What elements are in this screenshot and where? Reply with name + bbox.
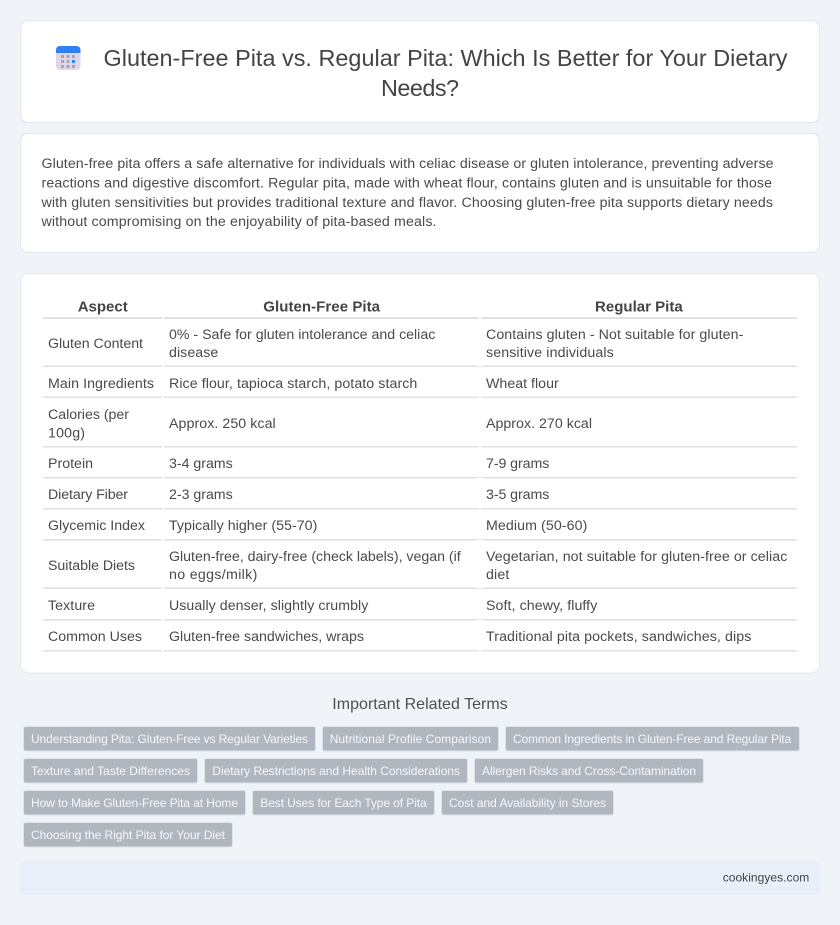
row: glycemic index: Medium (50-60)	[486, 518, 587, 534]
panel: related term tags: Best Uses for Each Type of Pita	[260, 796, 427, 810]
table rules	[43, 317, 797, 652]
row: protein: 3-4 grams	[169, 456, 233, 472]
row: common uses: Traditional pita pockets, sandwiches, dips	[486, 629, 751, 645]
row: dietary fiber: 3-5 grams	[486, 487, 549, 503]
row: suitable diets: no eggs/milk)	[169, 567, 257, 583]
row: suitable diets: Suitable Diets	[48, 558, 135, 574]
row: texture: Soft, chewy, fluffy	[486, 598, 598, 614]
heading: important related terms: Important Related Terms	[332, 696, 508, 713]
row: main ingredients: Wheat flour	[486, 376, 559, 392]
panel: related term tags: Dietary Restrictions and Health Considerations	[212, 764, 460, 778]
panel: related term tags: Understanding Pita: Gluten-Free vs Regular Varieties	[31, 732, 308, 746]
table header row: Gluten-Free Pita	[263, 299, 381, 316]
title: Needs?	[381, 75, 459, 101]
panel: introduction	[20, 134, 820, 252]
panel: related term tags: Choosing the Right Pita for Your Diet	[31, 828, 226, 842]
row: common uses: Common Uses	[48, 629, 142, 645]
row: suitable diets: Gluten-free, dairy-free (check labels), vegan (if	[169, 549, 461, 565]
title: Gluten-Free Pita vs. Regular Pita: Which Is Better for Your Dietary	[104, 45, 788, 71]
intro text: with gluten sensitivities but provides traditional texture and flavor. Choosing gluten-free pita supports dietary needs	[40, 195, 773, 211]
table header row: Regular Pita	[595, 299, 683, 316]
footer	[20, 861, 820, 895]
panel: related term tags: How to Make Gluten-Free Pita at Home	[31, 796, 238, 810]
row: calories: Approx. 250 kcal	[169, 416, 276, 432]
row: glycemic index	[48, 518, 587, 534]
row: calories: Approx. 270 kcal	[486, 416, 592, 432]
row: common uses: Gluten-free sandwiches, wraps	[169, 629, 364, 645]
table header row	[78, 299, 683, 316]
row: protein: Protein	[48, 456, 93, 472]
row: gluten content: Contains gluten - Not suitable for gluten-	[486, 327, 744, 343]
intro text: without compromising on the enjoyability of pita-based meals.	[40, 214, 436, 230]
row: gluten content: 0% - Safe for gluten intolerance and celiac	[169, 327, 435, 343]
intro text	[40, 156, 774, 230]
panel: related term tags: Cost and Availability in Stores	[449, 796, 606, 810]
row: gluten content	[48, 327, 744, 361]
row: main ingredients: Main Ingredients	[48, 376, 154, 392]
panel: related term tags	[24, 726, 800, 847]
row: calories: 100g)	[48, 426, 85, 442]
row: suitable diets: diet	[486, 567, 509, 583]
row: dietary fiber: Dietary Fiber	[48, 487, 128, 503]
title	[104, 45, 788, 101]
row: common uses	[48, 629, 751, 645]
panel: related term tags: Common Ingredients in Gluten-Free and Regular Pita	[513, 732, 792, 746]
row: protein: 7-9 grams	[486, 456, 549, 472]
row: gluten content: disease	[169, 345, 218, 361]
panel: related term tags: Texture and Taste Differences	[31, 764, 190, 778]
row: calories: Calories (per	[48, 407, 129, 423]
panel: comparison table	[20, 274, 820, 673]
row: suitable diets: Vegetarian, not suitable for gluten-free or celiac	[486, 549, 787, 565]
row: glycemic index: Glycemic Index	[48, 518, 145, 534]
row: suitable diets	[48, 549, 787, 583]
row: glycemic index: Typically higher (55-70)	[169, 518, 317, 534]
row: main ingredients: Rice flour, tapioca starch, potato starch	[169, 376, 417, 392]
intro text: reactions and digestive discomfort. Regular pita, made with wheat flour, contains gluten and is unsuitable for those	[42, 176, 772, 192]
table header row: Aspect	[78, 299, 128, 316]
row: texture	[48, 598, 598, 614]
row: protein	[48, 456, 549, 472]
row: texture: Texture	[48, 598, 95, 614]
footer: cookingyes.com	[723, 871, 809, 885]
row: gluten content: sensitive individuals	[486, 345, 614, 361]
panel: related term tags: Nutritional Profile Comparison	[330, 732, 491, 746]
row: calories	[48, 407, 592, 442]
row: main ingredients	[48, 376, 559, 392]
row: gluten content: Gluten Content	[48, 336, 143, 352]
row: dietary fiber: 2-3 grams	[169, 487, 233, 503]
icon: calendar	[56, 46, 80, 70]
panel: title header	[20, 20, 820, 122]
panel: related term tags: Allergen Risks and Cross-Contamination	[482, 764, 696, 778]
intro text: Gluten-free pita offers a safe alternative for individuals with celiac disease or gluten intolerance, preventing adverse	[42, 156, 774, 172]
row: dietary fiber	[48, 487, 549, 503]
row: texture: Usually denser, slightly crumbly	[169, 598, 369, 614]
